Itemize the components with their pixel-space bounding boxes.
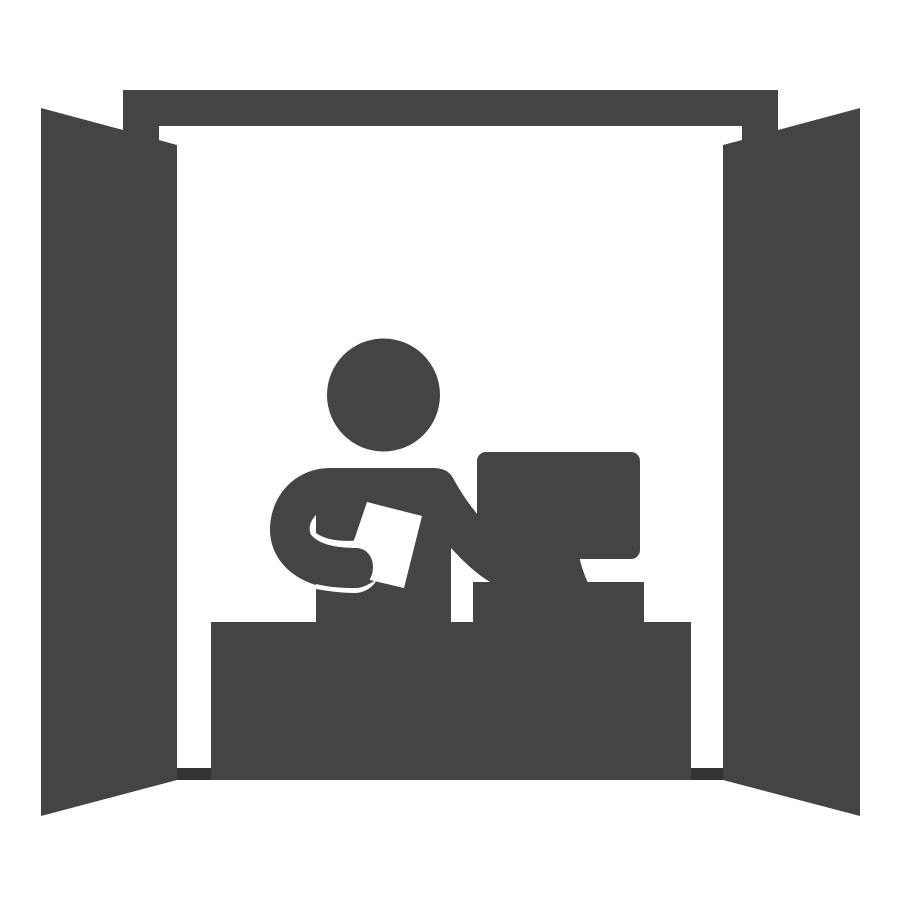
window frame top bar [123,90,778,131]
torso and arms [270,468,505,623]
hand [310,536,373,588]
left window door [41,108,177,816]
keyboard base [473,582,644,623]
sheet of paper [350,502,422,588]
right window door [723,108,860,816]
monitor stand [485,550,588,583]
white outline around the forearm [310,515,362,548]
monitor screen [477,452,640,559]
person [270,338,505,623]
lower outline of the forearm [316,580,376,593]
computer monitor [473,452,644,623]
window sill strips [177,768,723,780]
head [327,338,440,452]
counter desk [211,622,691,780]
